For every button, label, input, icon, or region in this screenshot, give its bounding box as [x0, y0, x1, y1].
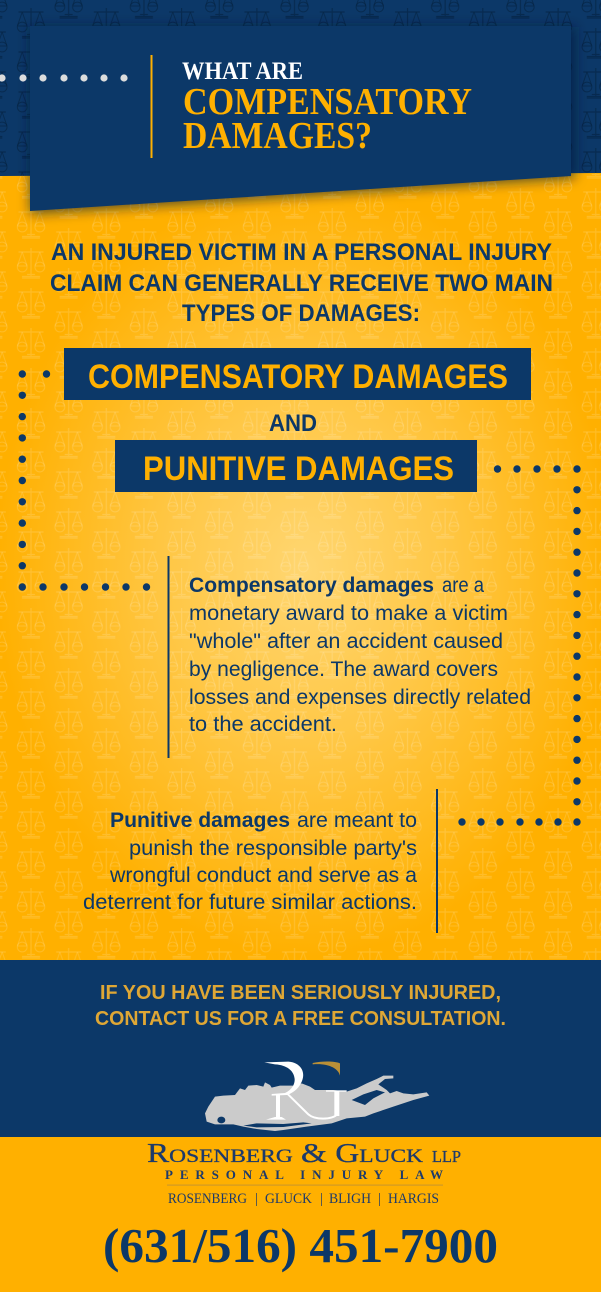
partner names: BLIGH: [329, 1191, 371, 1207]
logo: Long Island map with RG monogram: [205, 1062, 429, 1131]
compensatory damages definition: "whole" after an accident caused: [189, 630, 503, 653]
top navy background: [0, 0, 601, 177]
banner dots: [0, 74, 128, 82]
punitive damages definition: punish the responsible party's: [129, 837, 417, 860]
icon: gold swoosh: [313, 1062, 340, 1076]
partner names: HARGIS: [388, 1191, 439, 1207]
firm name: Rosenberg & Gluck: [147, 1138, 423, 1168]
title banner: [0, 26, 575, 214]
partner names: ROSENBERG: [168, 1191, 247, 1207]
partner names: |: [255, 1191, 258, 1207]
compensatory damages definition: monetary award to make a victim: [189, 602, 508, 625]
title: WHAT ARE: [182, 58, 303, 85]
partner names: |: [320, 1191, 323, 1207]
compensatory damages definition: by negligence. The award covers: [189, 658, 498, 681]
yellow footer band: [0, 1137, 601, 1292]
icon: R monogram: [264, 1062, 337, 1120]
punitive damages definition: wrongful conduct and serve as a: [109, 864, 417, 887]
title: COMPENSATORY: [183, 81, 472, 123]
phone number: (631/516) 451-7900: [103, 1218, 498, 1273]
compensatory damages box: [64, 348, 531, 400]
and: AND: [269, 410, 317, 437]
tagline rule: [167, 1184, 443, 1186]
title: [182, 58, 472, 157]
intro heading: CLAIM CAN GENERALLY RECEIVE TWO MAIN: [50, 270, 553, 297]
compensatory damages definition: are a: [442, 574, 484, 597]
punitive damages definition: are meant to: [297, 809, 417, 832]
call to action: [95, 981, 506, 1030]
partner names: [168, 1191, 439, 1207]
call to action: IF YOU HAVE BEEN SERIOUSLY INJURED,: [100, 981, 501, 1004]
banner divider: [150, 55, 152, 158]
partner names: |: [378, 1191, 381, 1207]
partner names: GLUCK: [265, 1191, 312, 1207]
tagline: PERSONAL INJURY LAW: [165, 1167, 443, 1182]
divider: punitive text: [436, 789, 438, 933]
call to action: CONTACT US FOR A FREE CONSULTATION.: [95, 1007, 506, 1030]
icon: G monogram: [326, 1090, 347, 1116]
punitive damages box: [115, 440, 477, 492]
title: DAMAGES?: [183, 115, 372, 157]
intro heading: TYPES OF DAMAGES:: [182, 300, 420, 327]
punitive damages definition: [83, 809, 417, 914]
compensatory damages definition: Compensatory damages: [189, 574, 434, 597]
intro heading: [50, 239, 553, 327]
navy call-to-action band: [0, 960, 601, 1138]
compensatory damages definition: losses and expenses directly related: [189, 686, 531, 709]
punitive damages definition: Punitive damages: [110, 809, 290, 832]
divider: compensatory text: [168, 556, 170, 758]
intro heading: AN INJURED VICTIM IN A PERSONAL INJURY: [51, 239, 552, 266]
left dotted connector: [19, 370, 150, 591]
icon: Long Island silhouette: [205, 1076, 429, 1131]
compensatory damages box: COMPENSATORY DAMAGES: [88, 358, 508, 396]
right dotted connector: [458, 465, 581, 826]
yellow patterned background: [0, 173, 601, 961]
compensatory damages definition: [189, 574, 531, 736]
firm name: LLP: [432, 1147, 461, 1166]
compensatory damages definition: to the accident.: [189, 713, 337, 736]
punitive damages definition: deterrent for future similar actions.: [83, 891, 417, 914]
icon: barrier beach gap: [243, 1122, 312, 1127]
punitive damages box: PUNITIVE DAMAGES: [143, 450, 454, 488]
